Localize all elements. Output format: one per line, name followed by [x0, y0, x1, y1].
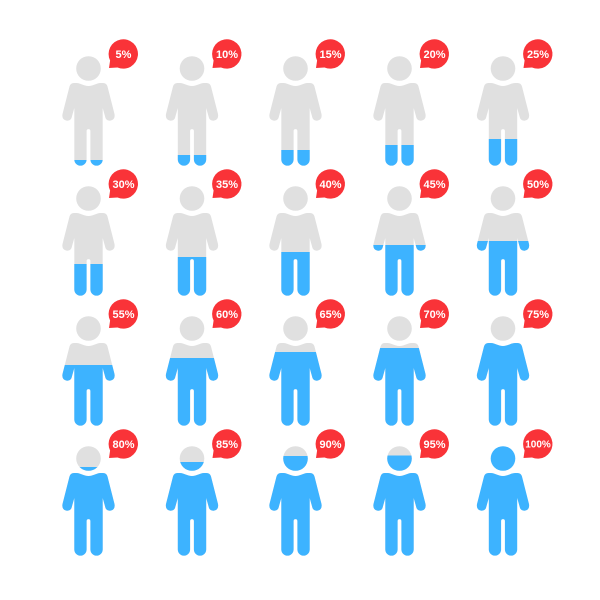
figure: 50%: 50% — [527, 179, 549, 191]
figure: 40% — [266, 169, 345, 300]
figure: 100%: 100% — [525, 440, 551, 450]
figure: 75% — [473, 299, 552, 430]
figure: 25% — [473, 39, 552, 170]
figure: 45%: 45% — [423, 179, 446, 191]
figure: 40%: 40% — [319, 179, 342, 191]
figure: 95%: 95% — [423, 439, 446, 451]
figure: 85% — [162, 429, 241, 560]
figure: 10% — [162, 39, 241, 170]
figure: 15%: 15% — [319, 49, 342, 61]
figure: 70%: 70% — [423, 309, 446, 321]
figure: 65% — [266, 299, 345, 430]
figure: 75%: 75% — [527, 309, 549, 321]
figure: 90%: 90% — [319, 439, 342, 451]
figure: 20% — [370, 39, 449, 170]
figure: 5%: 5% — [116, 49, 132, 61]
figure: 100% — [477, 429, 552, 556]
figure: 45% — [370, 169, 449, 300]
figure: 15% — [266, 39, 345, 170]
figure: 55%: 55% — [112, 309, 135, 321]
figure: 80% — [58, 429, 138, 560]
figure: 65%: 65% — [319, 309, 342, 321]
figure: 35% — [162, 169, 241, 300]
figure: 30% — [58, 169, 138, 300]
figure: 90% — [266, 429, 345, 560]
figure: 5% — [58, 39, 138, 170]
figure: 60%: 60% — [216, 309, 238, 321]
figure: 85%: 85% — [216, 439, 238, 451]
figure: 80%: 80% — [112, 439, 135, 451]
figure: 70% — [370, 299, 449, 430]
figure: 20%: 20% — [423, 49, 446, 61]
figure: 50% — [473, 169, 552, 300]
figure: 25%: 25% — [527, 49, 549, 61]
figure: 10%: 10% — [216, 49, 238, 61]
figure: 35%: 35% — [216, 179, 238, 191]
figure: 60% — [162, 299, 241, 430]
figure: 55% — [58, 299, 138, 430]
figure: 95% — [370, 429, 449, 560]
figure: 30%: 30% — [112, 179, 135, 191]
